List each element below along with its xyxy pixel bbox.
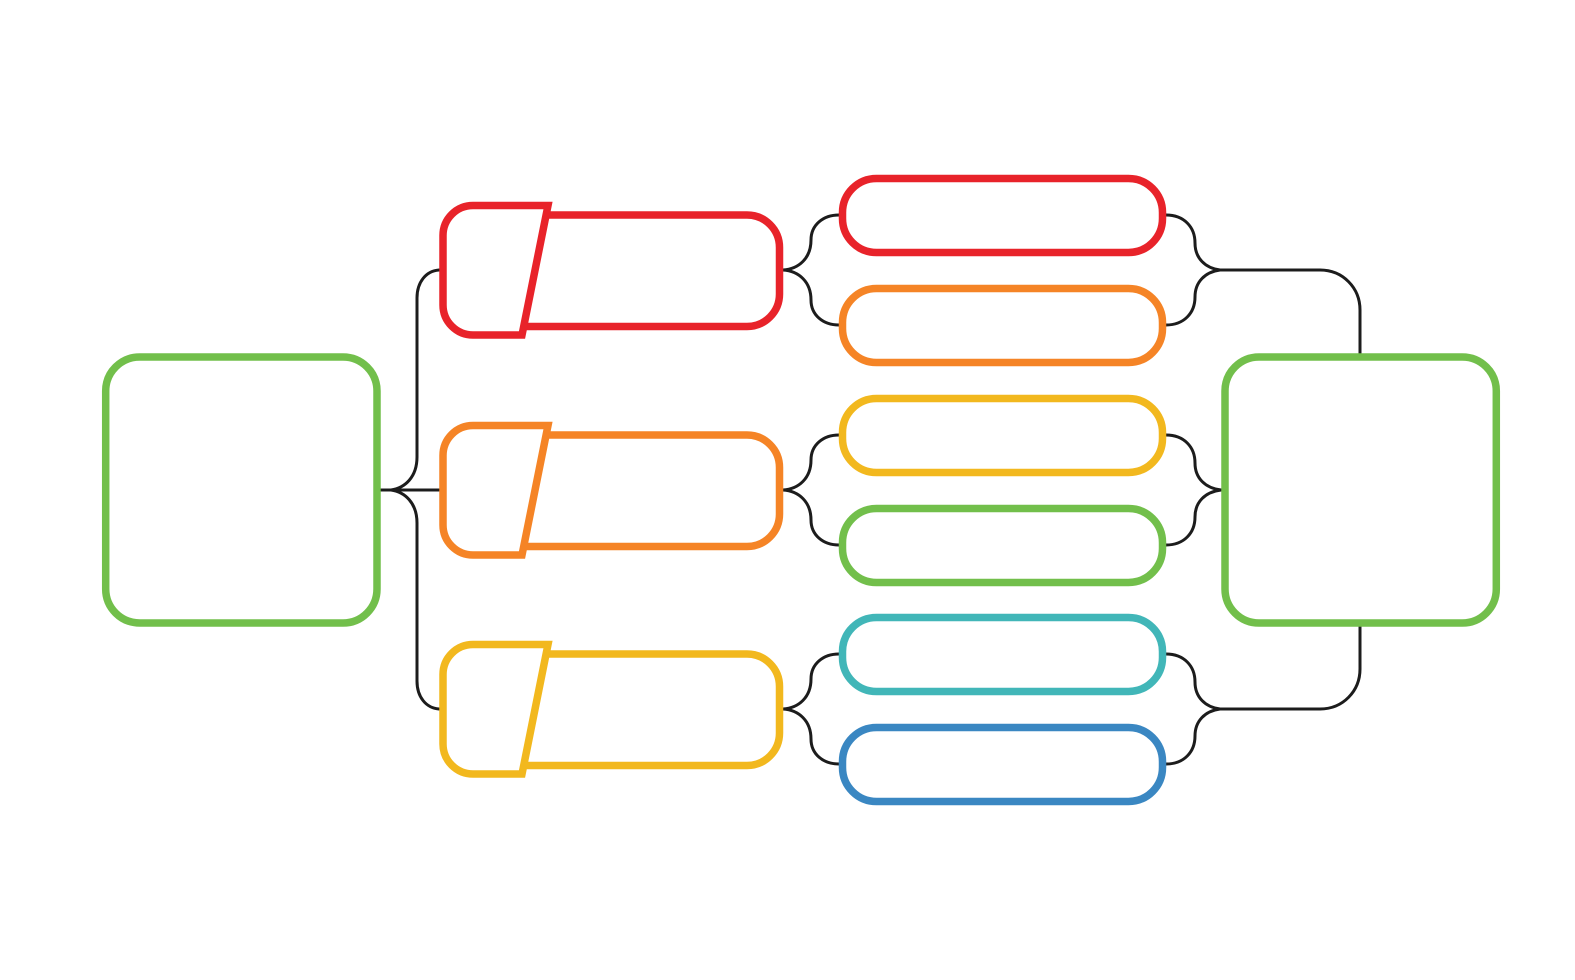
- panel: red tagged box: [443, 206, 780, 335]
- panel: yellow tagged box: [443, 644, 780, 774]
- pill: teal: [842, 618, 1162, 692]
- connector: middle pills to right box: [1166, 435, 1221, 545]
- connector: orange box to middle two pills: [783, 435, 839, 545]
- connector: red box to first two pills: [783, 215, 839, 325]
- tag: yellow: [443, 644, 548, 774]
- panel: right end box: [1225, 357, 1496, 623]
- connector: top pills to right box: [1166, 215, 1360, 354]
- pill: green: [842, 508, 1162, 582]
- panel: left start box: [106, 357, 377, 623]
- tag: orange: [443, 426, 548, 555]
- pill: blue: [842, 728, 1162, 802]
- connector: left box to three tagged boxes: [381, 270, 439, 709]
- pill: orange: [842, 288, 1162, 362]
- connector: bottom pills to right box: [1166, 626, 1360, 764]
- connector: yellow box to last two pills: [783, 654, 839, 764]
- pill: yellow: [842, 398, 1162, 472]
- tag: red: [443, 206, 548, 335]
- panel: orange tagged box: [443, 426, 780, 555]
- pill: red: [842, 178, 1162, 252]
